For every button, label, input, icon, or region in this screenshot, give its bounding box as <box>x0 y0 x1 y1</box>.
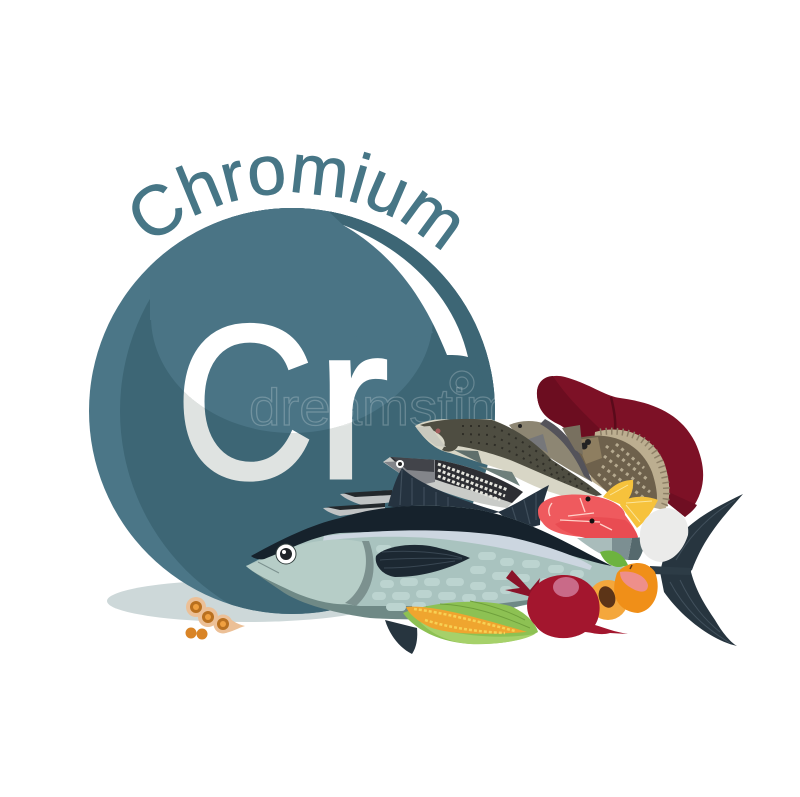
sardines <box>323 490 392 516</box>
watermark: dreamstime <box>249 379 544 437</box>
corn <box>403 601 538 644</box>
sphere <box>89 208 495 614</box>
shrimp <box>538 495 638 538</box>
tuna belly <box>246 566 560 619</box>
lemon slices <box>603 480 658 528</box>
tuna body <box>246 506 650 619</box>
mackerel <box>383 457 523 508</box>
pectoral fin <box>376 545 470 577</box>
highlight <box>343 225 468 357</box>
silver fish fragment <box>577 537 646 560</box>
dorsal fins <box>388 468 549 530</box>
element symbol: r <box>316 279 389 525</box>
title: Chromium <box>132 152 460 250</box>
soybeans <box>186 597 245 640</box>
apricot half <box>588 580 628 620</box>
element symbol: C <box>175 279 315 525</box>
food group <box>246 376 743 654</box>
egg <box>640 508 688 562</box>
trout <box>415 419 602 497</box>
tuna stripe <box>323 530 592 570</box>
tuna spots <box>372 545 584 611</box>
grey fish <box>509 419 592 482</box>
tuna head <box>246 540 368 604</box>
tail fin <box>650 494 743 646</box>
shadow under sphere <box>107 580 383 622</box>
liver <box>537 376 703 517</box>
infographic canvas <box>89 152 743 654</box>
flounder <box>576 430 669 510</box>
beet <box>505 570 628 638</box>
lower fin <box>385 620 417 654</box>
leaf <box>600 551 628 567</box>
tuna back <box>251 506 612 566</box>
apricot <box>614 563 658 613</box>
tuna eye <box>276 544 296 564</box>
